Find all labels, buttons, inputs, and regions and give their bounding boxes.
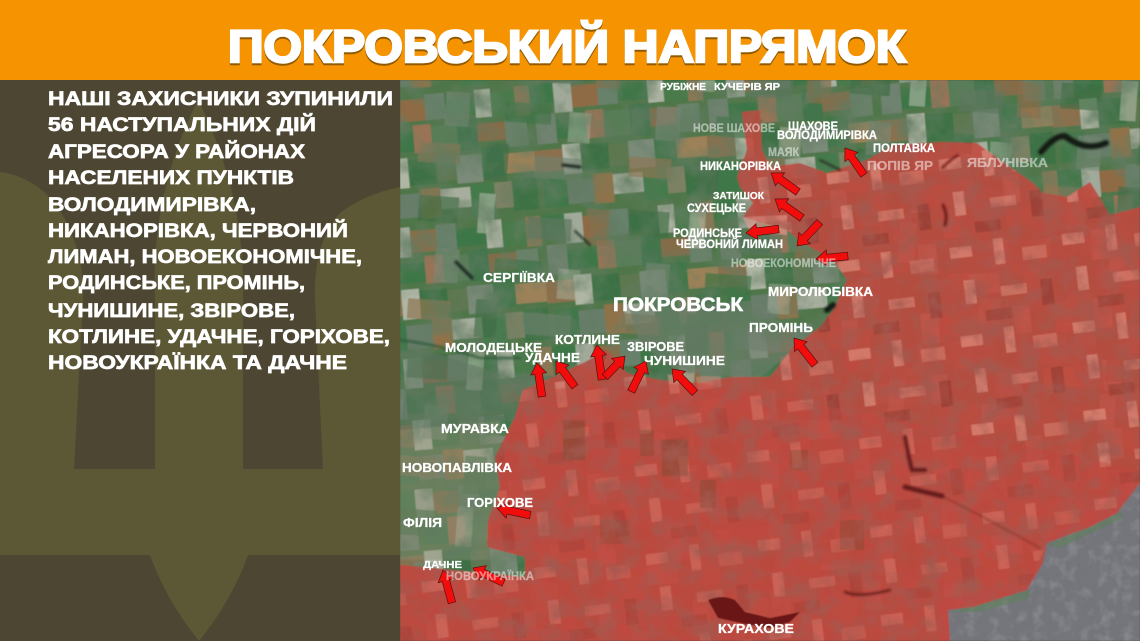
arrow: Zvirove (602, 356, 626, 380)
text block: summary: НИКАНОРІВКА, ЧЕРВОНИЙ (48, 218, 348, 242)
arrow: Kotlyne (590, 344, 607, 381)
occupied territory (400, 80, 1140, 641)
text block: summary: 56 НАСТУПАЛЬНИХ ДІЙ (48, 112, 316, 136)
label: ЯБЛУНІВКА (967, 155, 1049, 170)
text block: summary: ЧУНИШИНЕ, ЗВІРОВЕ, (48, 300, 295, 322)
label: МАЯК (768, 147, 800, 159)
map (400, 80, 1140, 641)
label: УДАЧНЕ (525, 351, 580, 365)
text block: summary (48, 88, 393, 374)
arrow: Chunyshyne east (672, 368, 698, 396)
arrow: Promin (794, 338, 818, 368)
label: Pokrovsk: ПОКРОВСЬК (613, 295, 743, 316)
water bodies and rivers (400, 136, 1106, 595)
arrow: Novoekonomichne (815, 248, 849, 267)
text block: summary: НАСЕЛЕНИХ ПУНКТІВ (48, 167, 294, 189)
label: КУЧЕРІВ ЯР (714, 82, 780, 93)
arrow: Dachne (438, 570, 456, 604)
label: ЗВІРОВЕ (627, 340, 684, 354)
label: РОДИНСЬКЕ (673, 228, 742, 240)
arrow: Horikhove (496, 502, 532, 520)
label: НОВОЕКОНОМІЧНЕ (731, 258, 836, 270)
text block: summary: РОДИНСЬКЕ, ПРОМІНЬ, (48, 272, 305, 294)
arrow: Nykanorivka (770, 172, 801, 196)
urban area: Kurakhove side (947, 483, 1140, 641)
label: МИРОЛЮБІВКА (768, 285, 873, 299)
label: ЧЕРВОНИЙ ЛИМАН (676, 238, 783, 251)
text block: summary: НАШІ ЗАХИСНИКИ ЗУПИНИЛИ (48, 88, 393, 110)
text block: summary: АГРЕСОРА У РАЙОНАХ (48, 139, 305, 163)
label: НОВОУКРАЇНКА (446, 570, 534, 583)
text block: summary: ВОЛОДИМИРІВКА, (48, 194, 256, 216)
text block: summary: НОВОУКРАЇНКА ТА ДАЧНЕ (48, 351, 347, 374)
title: ПОКРОВСЬКИЙ НАПРЯМОК (228, 21, 907, 72)
arrow: Chunyshyne west (627, 361, 649, 394)
label: СЕРГІЇВКА (483, 270, 555, 285)
arrow: Molodetske side (530, 362, 548, 398)
label: НОВЕ ШАХОВЕ (693, 123, 775, 135)
satellite base (400, 80, 1140, 641)
label: МУРАВКА (441, 422, 509, 436)
left panel (0, 80, 400, 641)
trident emblem (0, 100, 400, 641)
label: ГОРІХОВЕ (467, 496, 533, 510)
label: ЧУНИШИНЕ (644, 354, 725, 368)
arrow: Udachne (556, 360, 578, 390)
header band (0, 0, 1140, 80)
text block: summary: ЛИМАН, НОВОЕКОНОМІЧНЕ, (48, 246, 362, 268)
settlement labels (402, 82, 1049, 636)
label: ПОЛТАВКА (873, 143, 935, 155)
label: ДАЧНЕ (423, 559, 462, 571)
label: ЗАТИШОК (713, 190, 765, 202)
label: РУБІЖНЕ (660, 82, 706, 93)
label: КУРАХОВЕ (718, 622, 794, 636)
label: НОВОПАВЛІВКА (402, 461, 512, 475)
label: ПОПІВ ЯР (867, 158, 933, 173)
label: НИКАНОРІВКА (700, 161, 781, 173)
arrows (435, 143, 871, 605)
label: МОЛОДЕЦЬКЕ (445, 341, 542, 355)
arrow: Chervonyi Lyman (796, 219, 823, 246)
arrow: Volodymyrivka (844, 148, 868, 178)
label: КОТЛИНЕ (555, 333, 620, 347)
label: ВОЛОДИМИРІВКА (777, 130, 877, 142)
label: ПРОМІНЬ (749, 321, 813, 335)
text block: summary: КОТЛИНЕ, УДАЧНЕ, ГОРІХОВЕ, (48, 326, 390, 348)
arrow: Rodynske (746, 223, 780, 240)
label: ШАХОВЕ (788, 121, 838, 133)
reservoir: Kurakhove (708, 597, 800, 628)
label: СУХЕЦЬКЕ (687, 203, 746, 215)
arrow: Zatyshok (774, 198, 805, 222)
label: ФІЛІЯ (403, 516, 442, 530)
arrow: Novoukrainka (472, 565, 506, 586)
